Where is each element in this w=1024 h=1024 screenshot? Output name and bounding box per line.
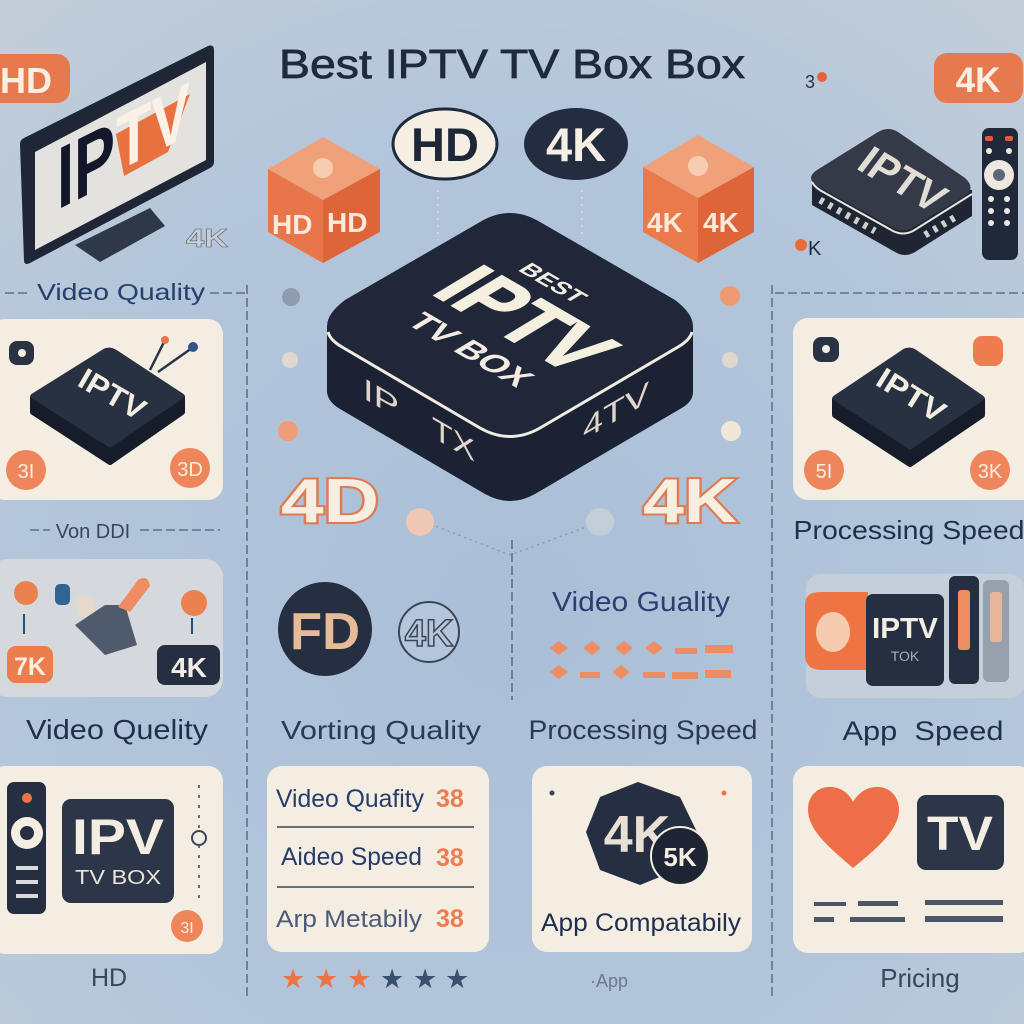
icon: HD cube: HD xyxy=(327,207,367,238)
panel: list card: Arp Metabily xyxy=(276,906,422,933)
panel: heart and TV card: TV xyxy=(927,808,993,861)
panel: list card: 38 xyxy=(436,905,464,933)
badge: HD dark pill: HD xyxy=(411,118,479,171)
panel: left 4K card xyxy=(0,559,223,697)
panel: remote card bottom left: TV BOX xyxy=(75,867,161,889)
title: Best IPTV TV Box Box xyxy=(279,41,746,87)
panel: left 4K card: 4K xyxy=(171,652,207,683)
panel: 4K badge card xyxy=(532,766,752,952)
icon: main IPTV box: IPTV xyxy=(415,253,637,385)
rating stars: ★ xyxy=(445,964,469,994)
icon: monitor with IPTV xyxy=(20,46,228,264)
icon: FD circle: FD xyxy=(290,603,360,661)
badge: 4K dark pill xyxy=(524,108,628,180)
icon: HD cube xyxy=(268,137,380,263)
rating dashes xyxy=(550,641,733,679)
icon: main IPTV box: TX xyxy=(432,410,475,468)
rating stars: ★ xyxy=(281,964,305,994)
icon: 4K cube xyxy=(643,135,754,263)
icon: FD circle xyxy=(278,582,372,676)
panel: list card: 38 xyxy=(436,785,464,813)
label: app: ·App xyxy=(590,971,628,991)
rating stars: ★ xyxy=(413,964,437,994)
badge: 4K top right xyxy=(934,53,1023,103)
decorative dots xyxy=(278,286,741,536)
label: 4K: 4K xyxy=(643,467,737,536)
icon: main IPTV box: TV BOX xyxy=(399,307,543,392)
label: voting quality: Vorting Quality xyxy=(281,715,481,745)
panel: right remote card: TOK xyxy=(891,648,920,664)
badge: HD dark pill xyxy=(393,109,497,179)
panel: right box card: IPTV xyxy=(870,362,951,430)
icon: box with remote top right: IPTV xyxy=(850,137,956,221)
panel: left 4K card: 7K xyxy=(14,653,46,681)
panel: right remote card xyxy=(805,574,1024,698)
panel: left box card: 3I xyxy=(18,461,34,483)
label: pricing: Pricing xyxy=(880,963,960,993)
panel: list card: Video Quafity xyxy=(276,785,424,813)
label: processing speed centre: Processing Speed xyxy=(528,715,758,745)
panel: list card xyxy=(267,766,489,952)
panel: 4K badge card: 5K xyxy=(663,842,697,872)
icon: monitor with IPTV: TV xyxy=(116,64,190,189)
rating stars: ★ xyxy=(347,964,371,994)
rating stars xyxy=(281,964,469,994)
panel: left box card: IPTV xyxy=(72,362,151,427)
icon: 4K circle xyxy=(399,602,459,662)
badge: HD top left xyxy=(0,54,70,103)
panel: right box card: 5I xyxy=(816,461,832,483)
icon: main IPTV box xyxy=(327,213,693,501)
rating stars: ★ xyxy=(380,964,404,994)
icon: box with remote top right xyxy=(795,72,1018,260)
badge: 4K dark pill: 4K xyxy=(546,118,606,171)
icon: box with remote top right: 3 xyxy=(805,72,815,92)
icon: box with remote top right: K xyxy=(808,238,822,260)
label: 4D: 4D xyxy=(281,467,379,536)
panel: remote card bottom left: IPV xyxy=(72,809,165,865)
icon: monitor with IPTV: 4K xyxy=(186,223,228,253)
label: video quality left: Video Quelity xyxy=(26,714,208,745)
icon: HD cube: HD xyxy=(272,209,312,240)
panel: 4K badge card: 4K xyxy=(604,806,671,864)
label: processing speed right: Processing Speed xyxy=(794,515,1024,545)
panel: right box card: 3K xyxy=(978,461,1003,483)
icon: main IPTV box: BEST xyxy=(513,259,594,307)
panel: list card: 38 xyxy=(436,844,464,872)
panel: heart and TV card xyxy=(793,766,1024,953)
icon: 4K cube: 4K xyxy=(647,207,683,238)
panel: remote card bottom left: 3I xyxy=(180,920,194,937)
panel: right box card xyxy=(793,318,1024,500)
badge: HD top left: HD xyxy=(0,60,52,101)
icon: 4K circle: 4K xyxy=(405,613,454,655)
icon: monitor with IPTV: IP xyxy=(57,102,115,229)
icon: 4K cube: 4K xyxy=(703,207,739,238)
panel: right remote card: IPTV xyxy=(872,613,939,645)
panel: list card: Aideo Speed xyxy=(281,843,422,871)
icon: main IPTV box: 4TV xyxy=(583,375,649,446)
icon: main IPTV box: IP xyxy=(363,371,399,425)
panel: left box card: 3D xyxy=(177,459,203,481)
badge: 4K top right: 4K xyxy=(956,61,1000,100)
label: app speed: App Speed xyxy=(842,716,1004,746)
label: HD: HD xyxy=(91,964,127,992)
panel: left box card xyxy=(0,319,223,500)
label: video quality: Video Quality xyxy=(37,279,206,305)
label: von DD: Von DDI xyxy=(56,521,130,543)
panel: remote card bottom left xyxy=(0,766,223,954)
heading: video quality centre: Video Guality xyxy=(552,586,730,617)
panel: 4K badge card: App Compatabily xyxy=(541,909,742,937)
rating stars: ★ xyxy=(314,964,338,994)
